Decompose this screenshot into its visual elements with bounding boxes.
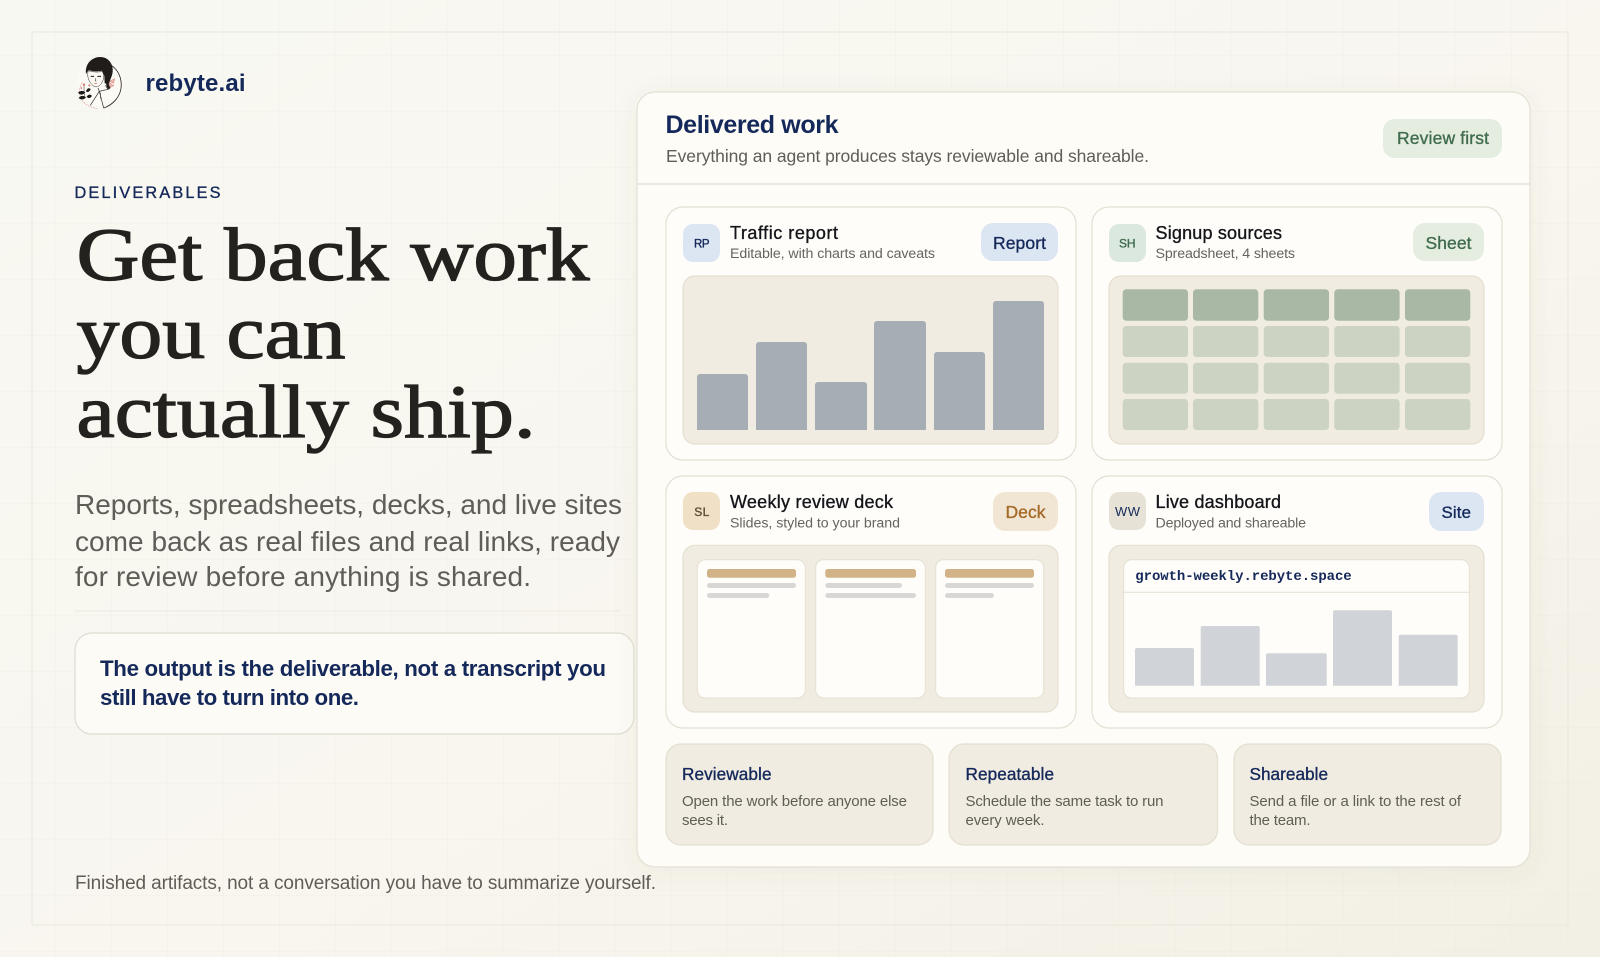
badge: report — [981, 223, 1058, 261]
slide 2 — [816, 560, 925, 698]
callout text: The output is the deliverable, not a transcript you — [100, 656, 606, 681]
badge: deck: Deck — [1006, 502, 1046, 522]
intro paragraph: Reports, spreadsheets, decks, and live sites — [75, 489, 622, 520]
callout — [75, 633, 634, 734]
icon: SL: SL — [694, 505, 710, 519]
slide 3 — [936, 560, 1044, 698]
panel subtitle: Everything an agent produces stays reviewable and shareable. — [666, 146, 1149, 166]
card title: Signup sources — [1156, 223, 1282, 243]
eyebrow label: DELIVERABLES — [74, 184, 221, 202]
url: growth-weekly.rebyte.space — [1135, 569, 1352, 585]
slides preview — [683, 545, 1058, 712]
benefit: shareable — [1234, 744, 1501, 845]
badge: report: Report — [993, 233, 1046, 253]
card title: Weekly review deck — [730, 492, 894, 512]
bar chart preview — [683, 276, 1058, 444]
benefit: reviewable — [666, 744, 933, 845]
panel: delivered work — [637, 92, 1530, 867]
card: traffic report — [666, 207, 1076, 460]
intro paragraph: for review before anything is shared. — [75, 561, 531, 592]
card subtitle: Slides, styled to your brand — [730, 516, 900, 532]
browser window — [1124, 560, 1469, 698]
card: weekly review deck — [666, 476, 1076, 728]
card title: Traffic report — [730, 223, 838, 243]
panel heading: Delivered work — [666, 111, 839, 139]
badge: deck — [993, 492, 1058, 531]
icon: SH — [1109, 224, 1146, 262]
icon: WW: WW — [1115, 504, 1141, 519]
benefit: shareable: Send a file or a link to the rest of — [1250, 793, 1462, 810]
callout text: still have to turn into one. — [100, 685, 359, 710]
intro paragraph — [75, 489, 622, 592]
card subtitle: Deployed and shareable — [1156, 516, 1306, 532]
card subtitle: Editable, with charts and caveats — [730, 246, 935, 262]
card subtitle: Spreadsheet, 4 sheets — [1156, 246, 1295, 262]
callout text — [100, 656, 606, 710]
title — [76, 214, 590, 454]
slide 1 — [697, 560, 805, 698]
logo: rebyte.ai brand — [77, 57, 246, 109]
mini bar chart — [1135, 610, 1458, 686]
badge: review first: Review first — [1397, 128, 1489, 148]
benefit: repeatable — [949, 744, 1218, 845]
benefit: reviewable: sees it. — [682, 812, 728, 829]
badge: site — [1429, 492, 1484, 531]
icon: SH: SH — [1119, 236, 1136, 250]
title: actually ship. — [76, 371, 536, 454]
benefit: repeatable: Repeatable — [966, 764, 1054, 784]
footnote: Finished artifacts, not a conversation you have to summarize yourself. — [75, 873, 656, 894]
icon: RP: RP — [694, 238, 710, 250]
spreadsheet preview — [1109, 276, 1484, 444]
icon: SL — [683, 492, 720, 530]
badge: review first — [1383, 119, 1502, 158]
site preview — [1109, 545, 1484, 712]
card title: Live dashboard — [1156, 492, 1281, 512]
benefit: shareable: Shareable — [1250, 764, 1328, 784]
icon: WW — [1109, 492, 1146, 530]
badge: sheet: Sheet — [1426, 233, 1472, 253]
title: you can — [76, 292, 346, 375]
title: Get back work — [76, 214, 590, 297]
intro paragraph: come back as real files and real links, ready — [75, 526, 620, 557]
benefit: reviewable: Reviewable — [682, 764, 772, 784]
card: live dashboard — [1092, 476, 1502, 728]
badge: sheet — [1413, 223, 1484, 261]
benefit: shareable: the team. — [1250, 812, 1310, 829]
icon: illustrated portrait — [77, 57, 124, 109]
brand name: rebyte.ai — [146, 70, 246, 97]
card: signup sources — [1092, 207, 1502, 460]
benefit: repeatable: every week. — [966, 812, 1044, 829]
badge: site: Site — [1442, 503, 1471, 522]
benefit: repeatable: Schedule the same task to run — [966, 793, 1164, 810]
benefit: reviewable: Open the work before anyone else — [682, 793, 907, 810]
icon: RP — [683, 224, 720, 262]
